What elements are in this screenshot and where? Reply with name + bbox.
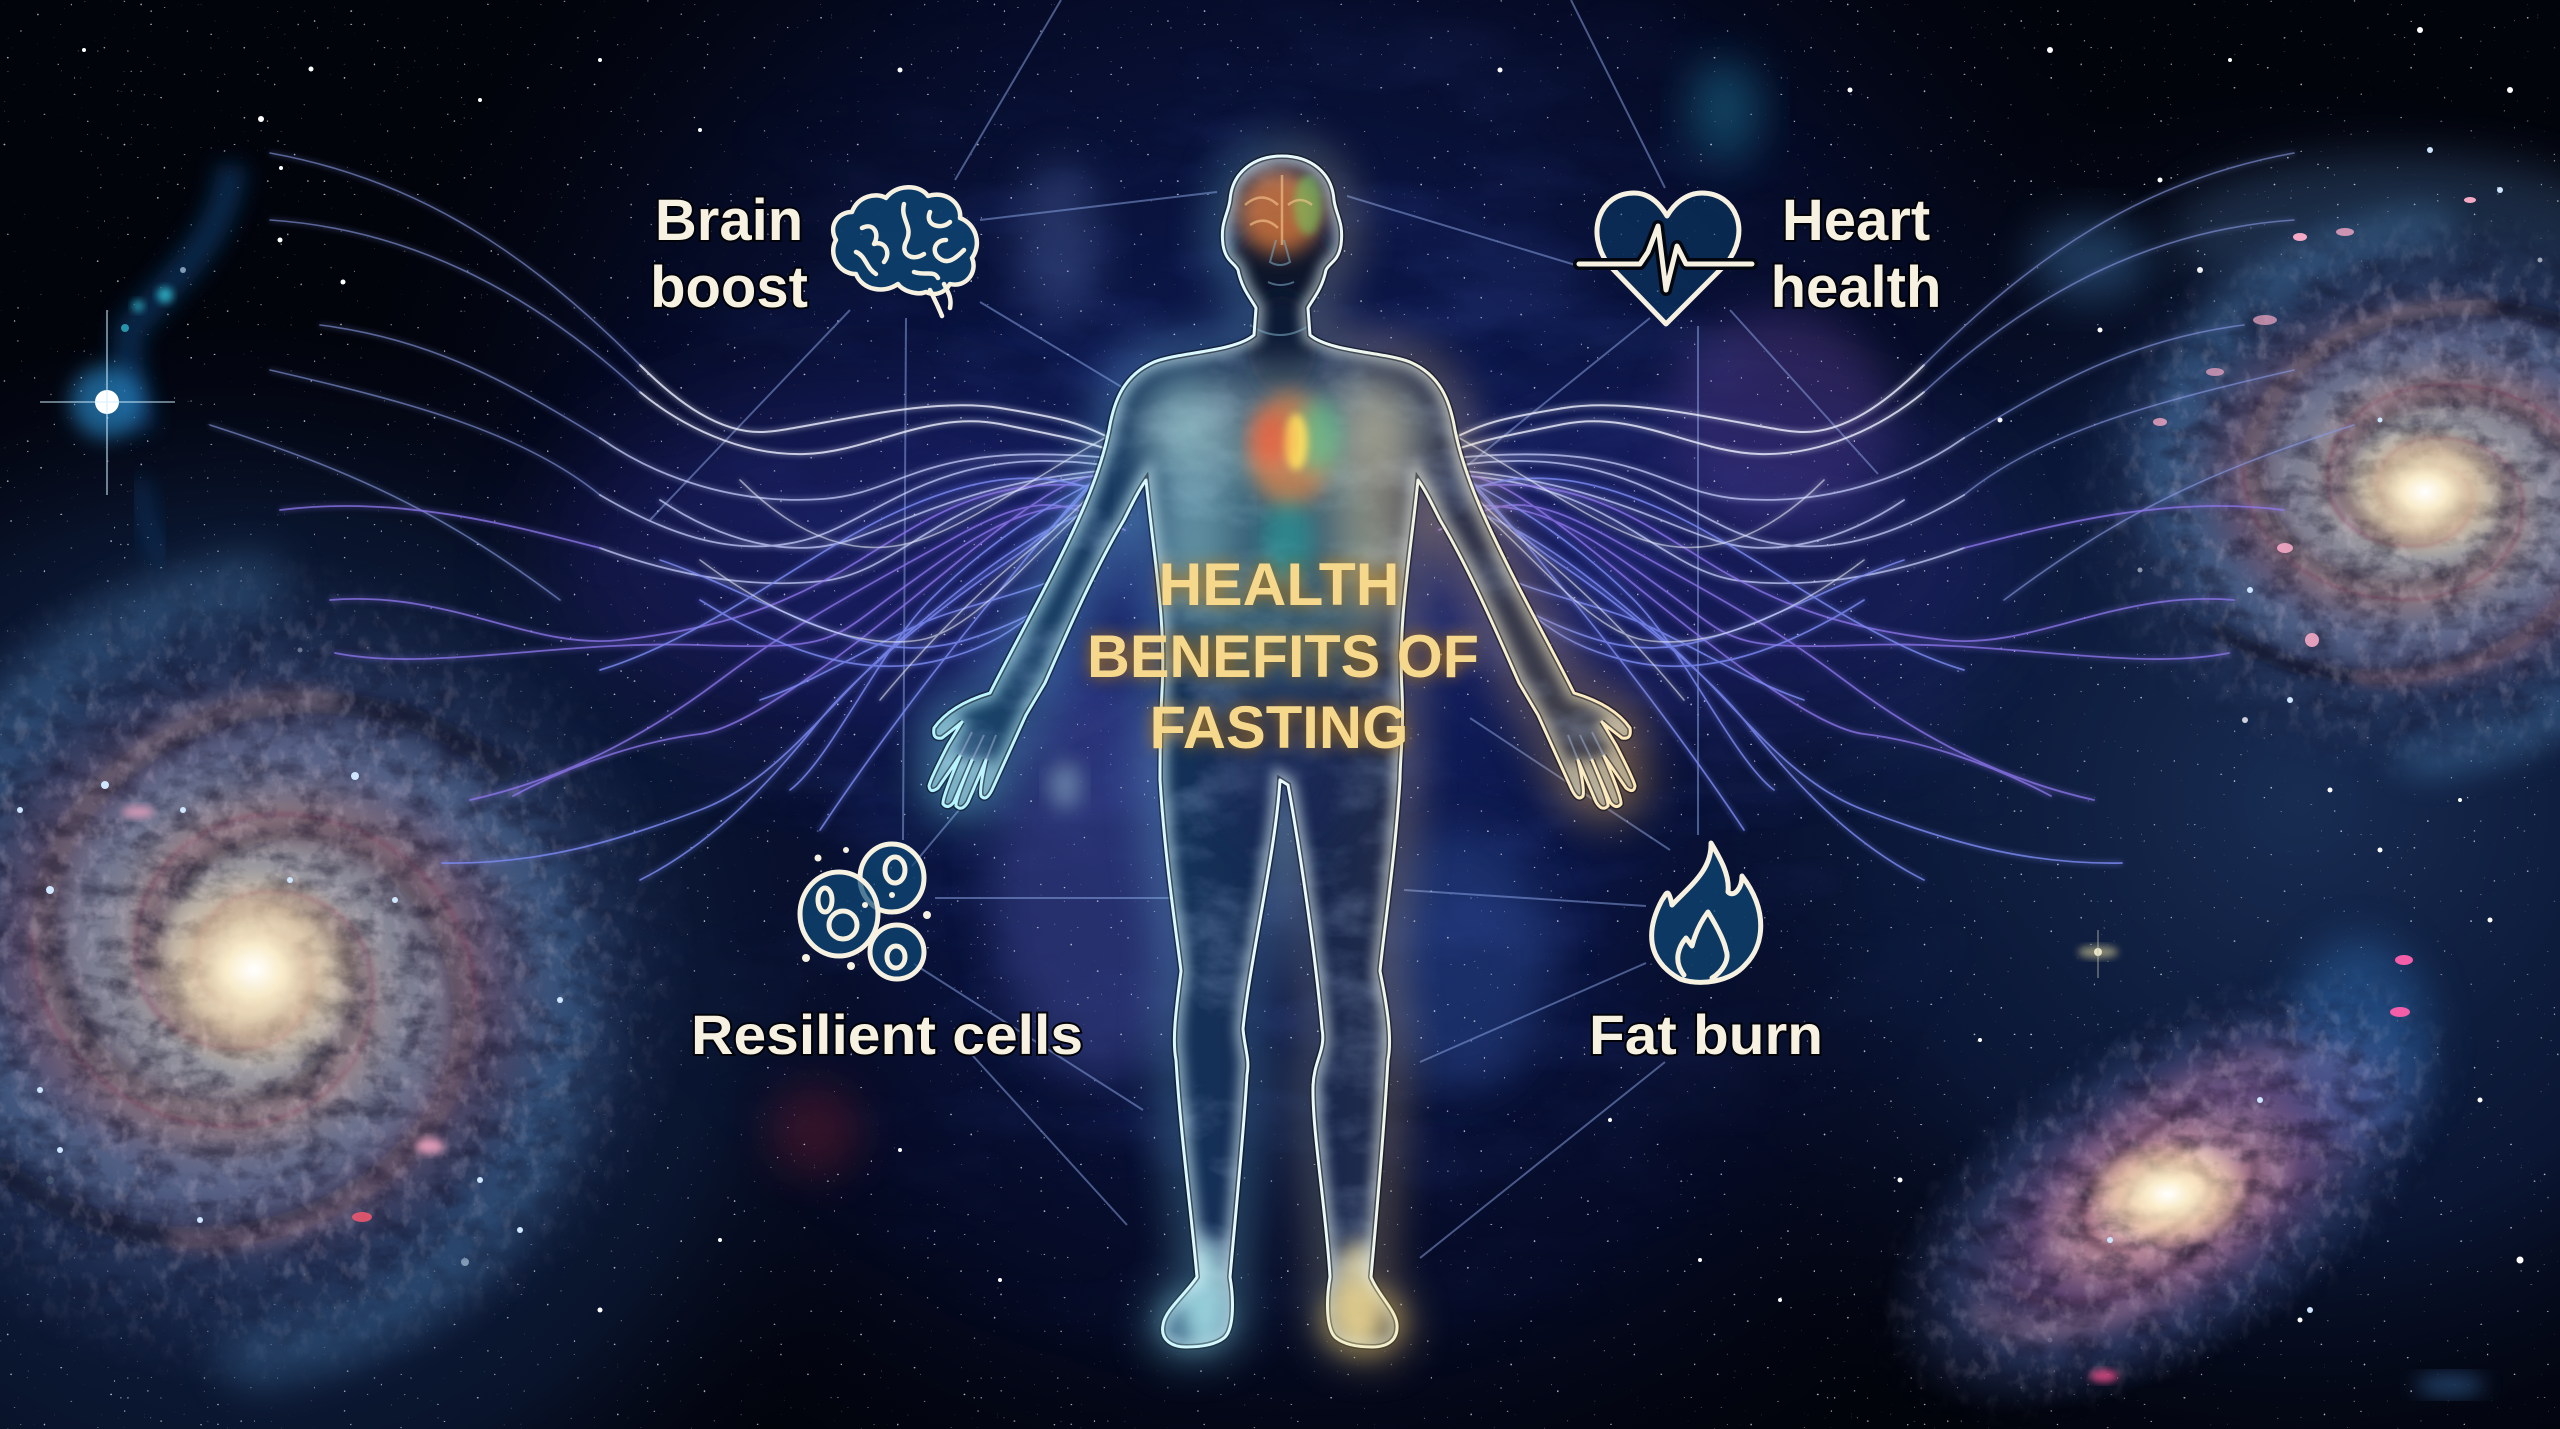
connection rays	[650, 0, 1878, 1258]
flare star: upper left	[40, 165, 232, 560]
icon: flame	[1652, 843, 1761, 982]
title: Health Benefits of Fasting: FASTING	[1150, 694, 1408, 761]
flare star: lower right	[2078, 930, 2118, 978]
body halo	[929, 156, 1635, 1347]
label: Heart health: Heart	[1782, 188, 1930, 253]
icon: resilient cells	[800, 844, 931, 979]
body figure	[920, 150, 1640, 1358]
energy waves: left wing	[210, 153, 1125, 880]
label: Brain boost	[650, 188, 808, 320]
icon: heart with pulse	[1579, 193, 1752, 324]
label: Brain boost: boost	[650, 255, 808, 320]
label: Fat burn: Fat burn	[1589, 1003, 1823, 1066]
title: Health Benefits of Fasting	[1087, 551, 1479, 761]
title: Health Benefits of Fasting: BENEFITS OF	[1087, 623, 1479, 690]
facial features	[1250, 240, 1310, 335]
label: Resilient cells: Resilient cells	[691, 1003, 1083, 1066]
label: Brain boost: Brain	[655, 188, 803, 253]
label: Heart health	[1771, 188, 1941, 320]
galaxy cores	[144, 424, 2510, 1250]
galaxy: lower left spiral	[0, 547, 700, 1393]
title: Health Benefits of Fasting: HEALTH	[1158, 551, 1400, 618]
brain glow inside head	[1238, 170, 1322, 254]
body interior	[920, 150, 1640, 1350]
energy waves: right wing	[1439, 153, 2354, 880]
body outline	[929, 156, 1635, 1347]
galaxy: lower right tilted spiral	[1800, 880, 2560, 1429]
galaxy: upper right spiral	[2058, 201, 2560, 783]
label: Heart health: health	[1771, 255, 1941, 320]
foot glow	[1155, 1282, 1406, 1358]
hand finger lines	[960, 732, 1604, 760]
icon: brain	[833, 187, 977, 316]
